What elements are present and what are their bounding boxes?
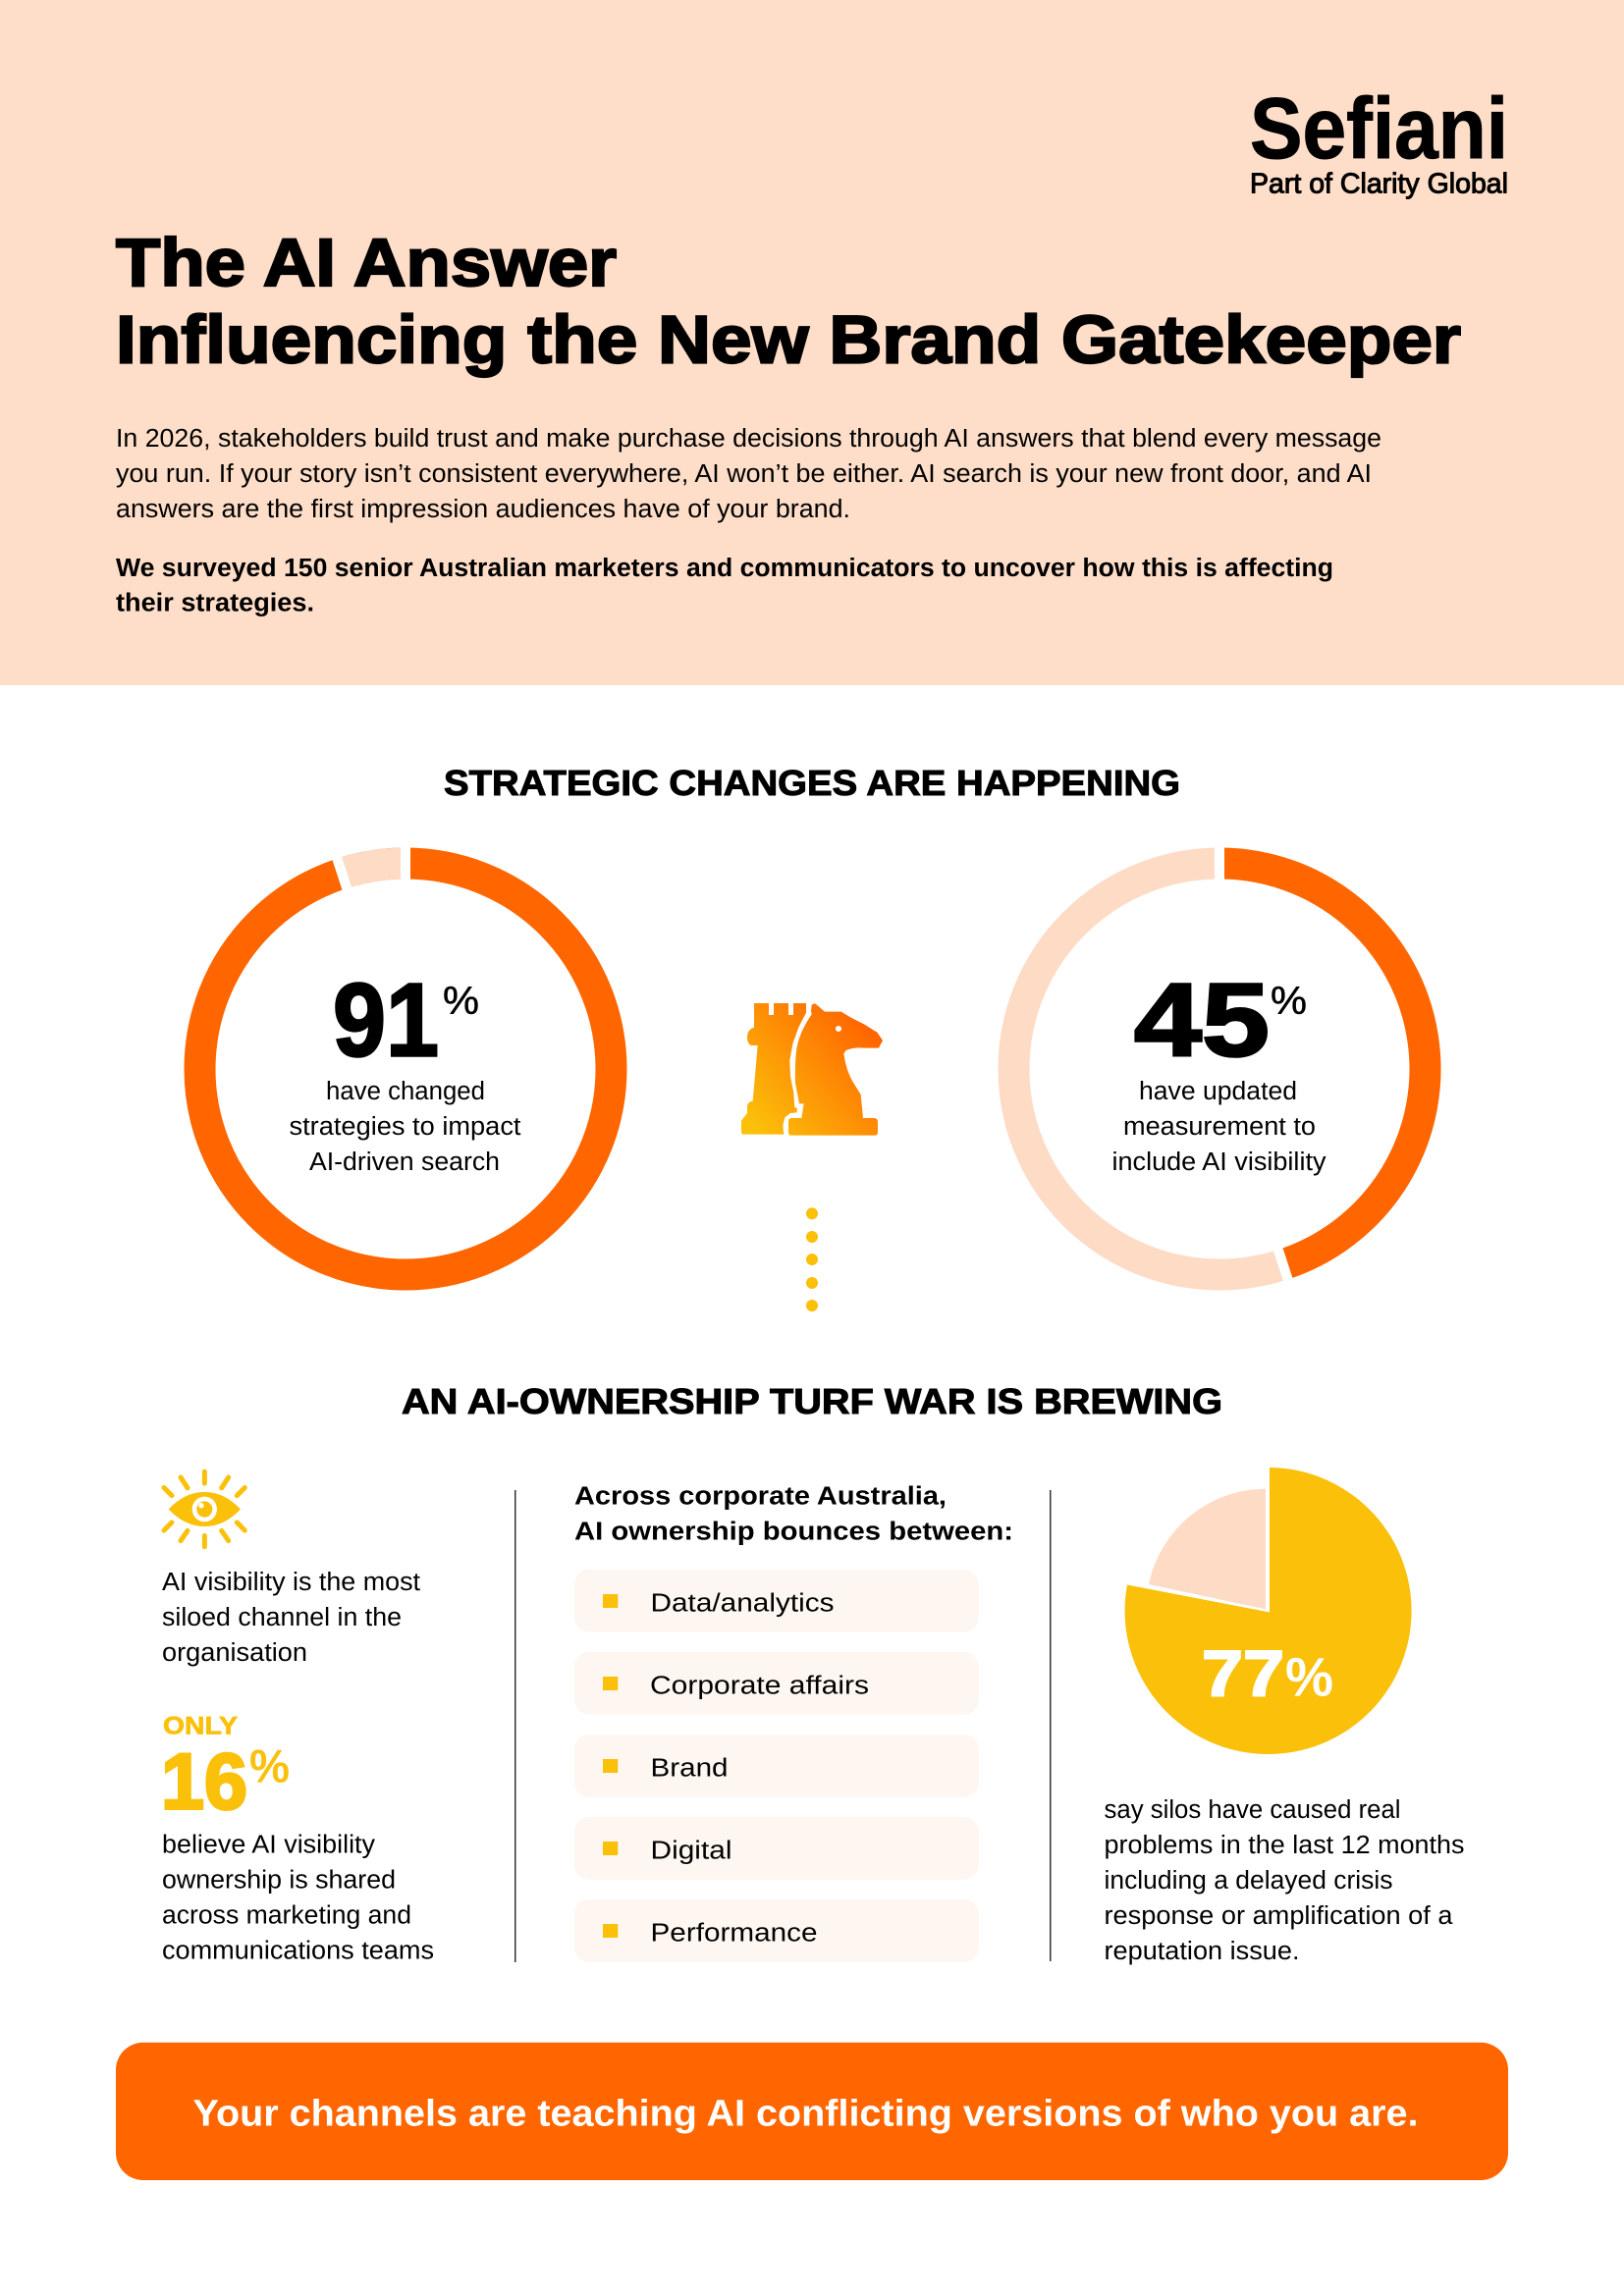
donut chart: 45%: measurement to <box>1123 1113 1316 1141</box>
donut chart: 91%: % <box>443 980 479 1023</box>
donut chart: 45% <box>1013 842 1426 1283</box>
callout: bottom banner <box>116 2043 1508 2180</box>
list item: data/analytics: Data/analytics <box>650 1590 835 1618</box>
subheading <box>574 1483 1013 1546</box>
list item: corporate affairs <box>574 1652 979 1715</box>
list item: performance <box>574 1899 979 1962</box>
text: shared ownership: communications teams <box>162 1938 434 1965</box>
pie chart: 77%: 77 <box>1202 1637 1284 1710</box>
list item: digital <box>574 1817 979 1880</box>
list item: corporate affairs: Corporate affairs <box>650 1673 869 1700</box>
logo: Sefiani: Part of Clarity Global <box>1250 169 1508 200</box>
text: shared ownership: across marketing and <box>162 1902 411 1930</box>
title: The AI Answer <box>116 225 617 300</box>
text: silos caused problems: reputation issue. <box>1104 1938 1300 1965</box>
text: most siloed channel <box>162 1569 420 1667</box>
text: silos caused problems: problems in the last 12 months <box>1104 1832 1465 1859</box>
panel: right column <box>1104 1468 1465 1965</box>
text: shared ownership: believe AI visibility <box>162 1832 375 1859</box>
intro paragraph <box>116 425 1381 523</box>
title: Influencing the New Brand Gatekeeper <box>116 302 1461 377</box>
text: most siloed channel: AI visibility is the most <box>162 1569 420 1596</box>
intro paragraph: answers are the first impression audiences have of your brand. <box>116 496 850 523</box>
stat: only 16%: 16 <box>161 1737 247 1826</box>
callout: bottom banner: Your channels are teaching AI conflicting versions of who you are. <box>192 2093 1418 2134</box>
survey statement: their strategies. <box>116 589 314 616</box>
donut chart: 91% <box>200 842 611 1274</box>
stat: only 16%: ONLY <box>163 1712 238 1739</box>
list item: digital: Digital <box>650 1838 732 1865</box>
donut chart: 91%: have changed <box>326 1078 485 1105</box>
intro paragraph: In 2026, stakeholders build trust and make purchase decisions through AI answers that blend every message <box>116 425 1381 453</box>
donut chart: 45%: 45 <box>1134 962 1270 1078</box>
pie chart: 77% <box>1125 1468 1412 1754</box>
intro paragraph: you run. If your story isn’t consistent everywhere, AI won’t be either. AI search is your new front door, and AI <box>116 460 1372 488</box>
list item: data/analytics <box>574 1570 979 1632</box>
text: shared ownership: ownership is shared <box>162 1867 396 1895</box>
icon: chess rook and knight <box>741 1003 883 1136</box>
heading: strategic changes: STRATEGIC CHANGES ARE HAPPENING <box>444 763 1180 803</box>
text: shared ownership <box>162 1832 434 1965</box>
text: silos caused problems: say silos have caused real <box>1104 1796 1400 1824</box>
text: silos caused problems <box>1104 1796 1465 1965</box>
panel: header background <box>0 0 1624 685</box>
icon: eye <box>164 1471 244 1547</box>
panel: middle column <box>574 1483 1013 1962</box>
text: most siloed channel: siloed channel in the <box>162 1604 402 1631</box>
list item: brand: Brand <box>650 1755 729 1783</box>
subheading: Across corporate Australia, <box>574 1483 947 1511</box>
panel: left column <box>161 1471 434 1965</box>
list item: performance: Performance <box>650 1920 817 1948</box>
donut chart: 45%: % <box>1271 980 1307 1023</box>
donut chart: 91%: strategies to impact <box>289 1113 520 1141</box>
survey statement <box>116 555 1333 616</box>
donut chart: 91%: 91 <box>333 962 439 1078</box>
logo: Sefiani: Sefiani <box>1250 80 1508 177</box>
text: silos caused problems: including a delayed crisis <box>1104 1867 1392 1895</box>
stat: only 16% <box>161 1712 290 1826</box>
text: most siloed channel: organisation <box>162 1639 307 1667</box>
title <box>116 225 1461 377</box>
pie chart: 77%: % <box>1285 1646 1333 1708</box>
stat: only 16%: % <box>249 1739 290 1792</box>
donut chart: 91%: AI-driven search <box>309 1148 500 1176</box>
subheading: AI ownership bounces between: <box>574 1519 1013 1546</box>
list item: brand <box>574 1735 979 1797</box>
donut chart: 45%: have updated <box>1139 1078 1297 1105</box>
dotted connector <box>806 1207 818 1311</box>
text: silos caused problems: response or amplification of a <box>1104 1902 1453 1930</box>
donut chart: 45%: include AI visibility <box>1111 1148 1326 1176</box>
survey statement: We surveyed 150 senior Australian marketers and communicators to uncover how this is affecting <box>116 555 1333 582</box>
heading: turf war: AN AI-OWNERSHIP TURF WAR IS BREWING <box>402 1381 1222 1421</box>
